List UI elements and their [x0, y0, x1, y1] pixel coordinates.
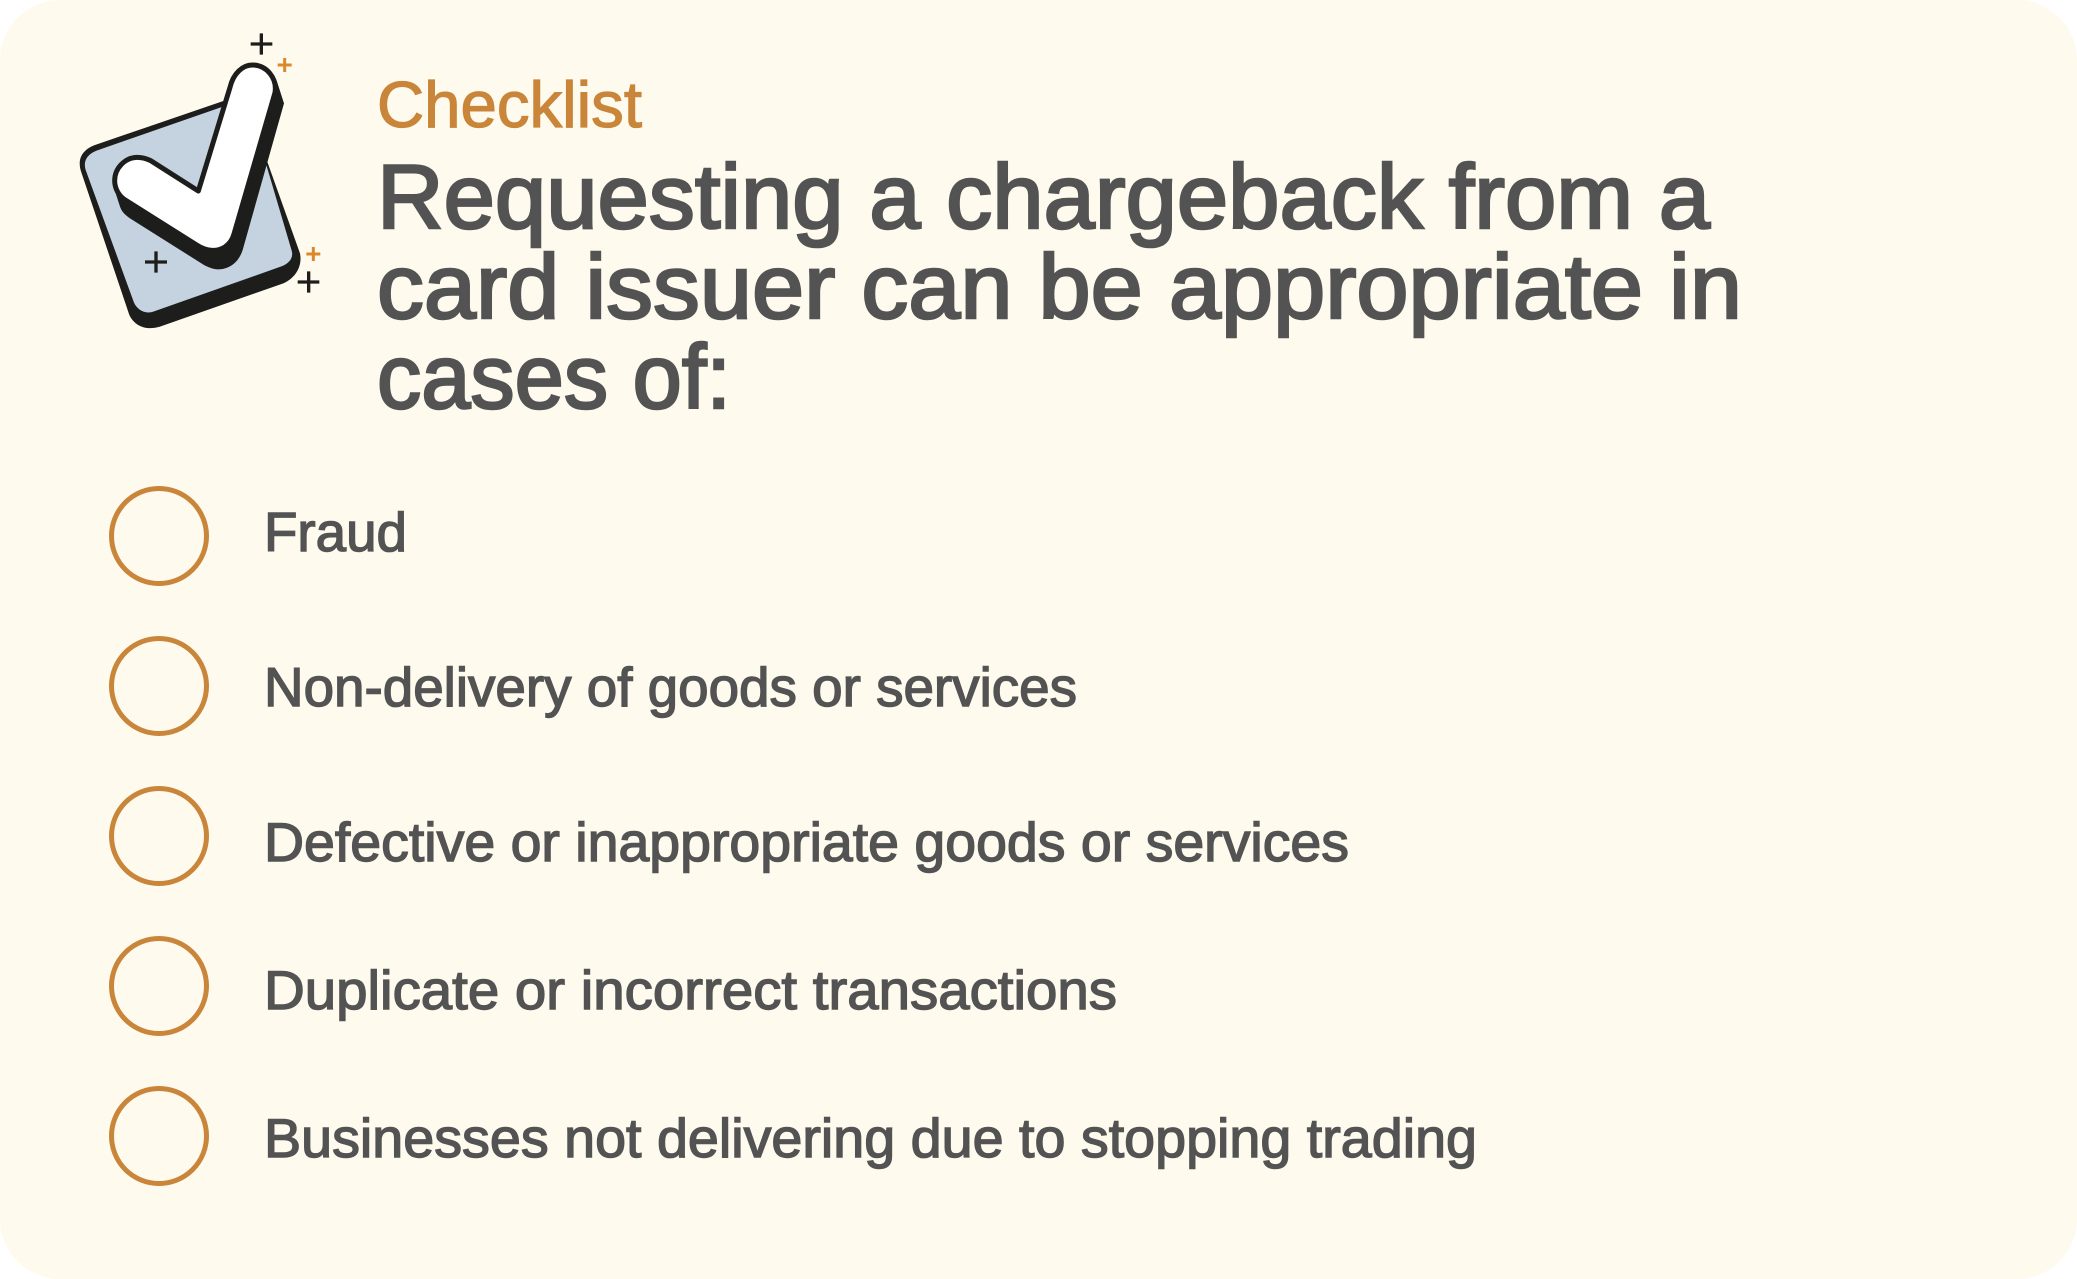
- item 1: [112, 488, 407, 584]
- icon: orange sparkle right: [306, 247, 320, 261]
- item 3: [112, 788, 1349, 884]
- icon: check mark shadow: [113, 81, 284, 269]
- checklist items: [112, 488, 1477, 1184]
- heading line 3: cases of:: [377, 327, 731, 428]
- checkbox circle: [112, 938, 206, 1034]
- item label: Businesses not delivering due to stopping trading: [264, 1107, 1477, 1169]
- eyebrow label: Checklist: Checklist: [377, 68, 642, 141]
- item label: Non-delivery of goods or services: [264, 656, 1077, 718]
- item label: Fraud: [264, 501, 407, 563]
- heading: [377, 147, 1742, 428]
- icon: box base and outline: [80, 101, 301, 328]
- item label: Defective or inappropriate goods or services: [264, 811, 1349, 873]
- item label: Duplicate or incorrect transactions: [264, 959, 1117, 1021]
- checkbox circle: [112, 1088, 206, 1184]
- heading line 2: card issuer can be appropriate in: [377, 237, 1742, 338]
- icon: black sparkle inside box: [145, 251, 167, 273]
- item 2: [112, 638, 1077, 734]
- checkbox circle: [112, 638, 206, 734]
- icon: black sparkle right: [298, 271, 319, 293]
- checkbox circle: [112, 488, 206, 584]
- heading line 1: Requesting a chargeback from a: [377, 147, 1710, 248]
- item 5: [112, 1088, 1477, 1184]
- icon: black sparkle top: [251, 33, 272, 55]
- checkbox circle: [112, 788, 206, 884]
- icon: white check mark: [115, 65, 275, 250]
- icon: tilted checkbox with check mark: [80, 33, 320, 328]
- icon: blue box face: [85, 98, 292, 312]
- item 4: [112, 938, 1117, 1034]
- icon: orange sparkle top: [278, 58, 292, 72]
